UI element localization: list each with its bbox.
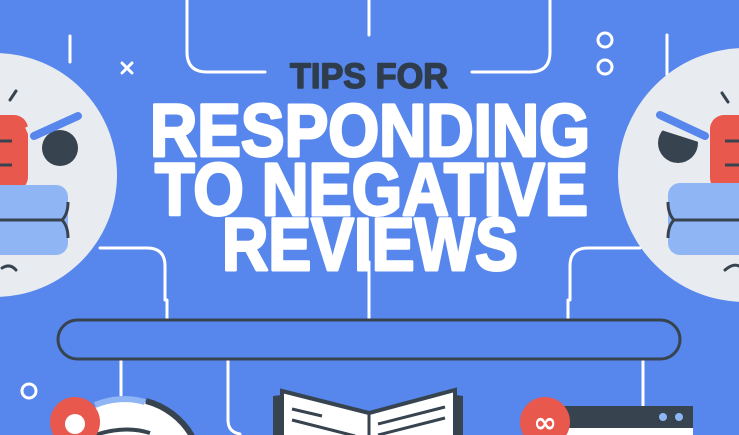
- title: TO NEGATIVE: [155, 148, 588, 231]
- icon: small circles: [22, 33, 612, 398]
- icon: browser window: [520, 397, 693, 435]
- icon: x mark: [122, 63, 132, 73]
- icon: gauge: [50, 397, 203, 435]
- icon: book: [273, 390, 463, 435]
- title: REVIEWS: [222, 203, 518, 286]
- title: [150, 57, 590, 286]
- left angry face: [0, 53, 117, 297]
- title: TIPS FOR: [290, 57, 448, 96]
- title: RESPONDING: [150, 89, 590, 172]
- right angry face: [618, 48, 739, 302]
- bar: [58, 320, 680, 359]
